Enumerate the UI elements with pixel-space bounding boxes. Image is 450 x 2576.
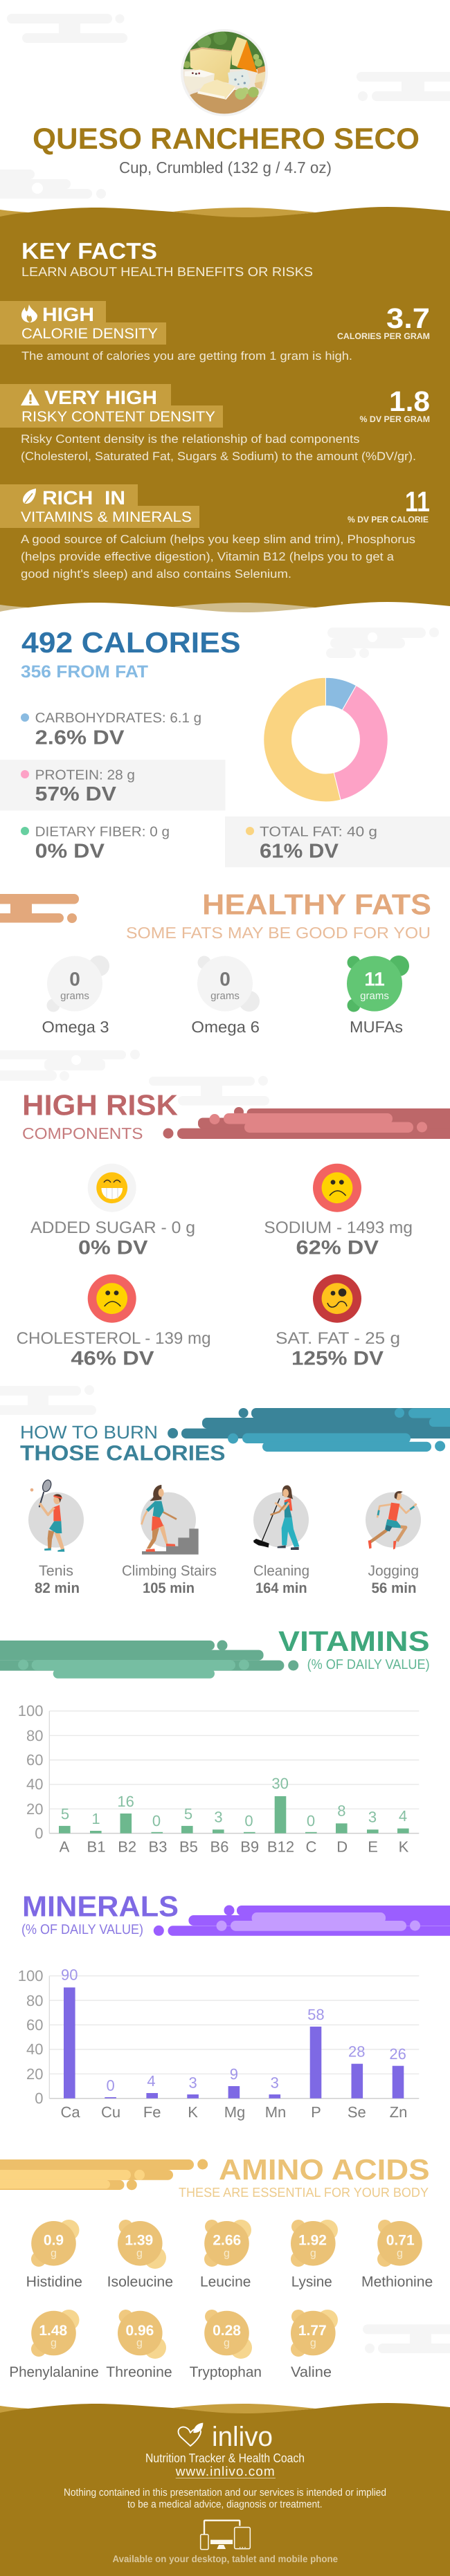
bar chart: vitamins: B9: [240, 1838, 259, 1855]
bar chart: minerals: 28: [348, 2043, 366, 2061]
amino: leucine: g: [224, 2247, 230, 2259]
panel: minerals: [18, 1890, 450, 2121]
bar chart: minerals: 4: [147, 2072, 156, 2090]
activity: tennis: Tenis: [39, 1563, 73, 1579]
stat: total fat: TOTAL FAT: 40 g: [260, 825, 377, 840]
bar chart: vitamins: 0: [307, 1812, 315, 1829]
bar chart: minerals: Mn: [265, 2103, 286, 2121]
amino: tryptophan: 0.28: [213, 2323, 241, 2339]
fact: very high risky content density: RISKY CONTENT DENSITY: [21, 409, 215, 425]
components subheading: COMPONENTS: [22, 1124, 143, 1142]
panel: key facts: [0, 207, 450, 623]
mufas: [347, 956, 409, 1036]
bar chart: vitamins: 20: [26, 1800, 43, 1818]
amino: threonine: 0.96: [125, 2323, 154, 2339]
fact: high calorie density: The amount of calories you are getting from 1 gram is high.: [21, 349, 352, 363]
fact: high calorie density: CALORIES PER GRAM: [337, 331, 430, 341]
amino: valine: g: [310, 2337, 316, 2349]
high risk heading: HIGH RISK: [22, 1088, 178, 1121]
fact: very high risky content density: 1.8: [389, 385, 430, 417]
fact: very high risky content density: % DV PER GRAM: [360, 414, 430, 424]
fact: rich in vitamins and minerals: VITAMINS & MINERALS: [21, 509, 192, 525]
how to burn heading: HOW TO BURN: [20, 1422, 158, 1443]
healthy fats heading: HEALTHY FATS: [202, 888, 431, 921]
bar chart: vitamins: [18, 1702, 419, 1855]
bar chart: vitamins: 5: [61, 1805, 69, 1823]
bar chart: vitamins: 30: [271, 1775, 289, 1792]
amino: valine: [291, 2310, 338, 2380]
item: added sugar: ADDED SUGAR - 0 g: [30, 1218, 195, 1237]
omega 3: Omega 3: [42, 1018, 109, 1036]
availability note: Available on your desktop, tablet and mobile phone: [112, 2553, 338, 2564]
bar chart: vitamins: 80: [26, 1727, 43, 1744]
fact: high calorie density: 3.7: [386, 302, 430, 334]
bar chart: minerals: 9: [230, 2065, 238, 2083]
brand name: inlivo: [212, 2422, 273, 2452]
fact: rich in vitamins and minerals: % DV PER CALORIE: [348, 515, 429, 524]
activity: tennis: 82 min: [35, 1580, 80, 1596]
amino: tryptophan: [190, 2310, 262, 2380]
item: cholesterol: 46% DV: [71, 1348, 154, 1370]
stat: protein: PROTEIN: 28 g: [35, 768, 135, 783]
minerals subheading: (% OF DAILY VALUE): [21, 1922, 143, 1937]
omega 6: 0: [219, 969, 231, 989]
donut chart: macronutrients: [264, 677, 388, 802]
item: sodium: SODIUM - 1493 mg: [264, 1218, 413, 1237]
stat: total fat: 61% DV: [260, 841, 339, 863]
stat: carbohydrates: CARBOHYDRATES: 6.1 g: [35, 711, 201, 726]
bar chart: vitamins: 5: [184, 1805, 192, 1823]
activity: climbing stairs: 105 min: [143, 1580, 195, 1596]
item: cholesterol: [17, 1275, 211, 1370]
bar chart: minerals: 3: [188, 2074, 197, 2091]
decorative bars: [163, 1107, 450, 1139]
amino acids heading: AMINO ACIDS: [219, 2153, 430, 2186]
bar chart: vitamins: 1: [91, 1810, 100, 1827]
panel: vitamins: [0, 1625, 430, 1855]
amino: methionine: 0.71: [386, 2233, 415, 2249]
omega 6: grams: [210, 990, 240, 1002]
item: sodium: 62% DV: [296, 1237, 379, 1259]
key facts subheading: LEARN ABOUT HEALTH BENEFITS OR RISKS: [21, 264, 313, 279]
icon: inlivo heart logo: [179, 2423, 203, 2446]
item: sodium: [264, 1164, 413, 1259]
panel: amino acids: [0, 2153, 450, 2380]
fact: rich in vitamins and minerals: [0, 484, 430, 581]
fact: high calorie density: CALORIE DENSITY: [21, 326, 158, 342]
item: saturated fat: [276, 1275, 400, 1370]
bar chart: minerals: 58: [307, 2006, 325, 2023]
amino: histidine: 0.9: [44, 2233, 64, 2249]
amino: methionine: Methionine: [361, 2274, 433, 2290]
bar chart: minerals: 26: [389, 2045, 406, 2063]
activity: jogging: Jogging: [368, 1563, 419, 1579]
omega 6: Omega 6: [191, 1018, 260, 1036]
fact: very high risky content density: VERY HIGH: [44, 387, 157, 408]
minerals heading: MINERALS: [22, 1890, 179, 1922]
bar chart: minerals: 20: [26, 2065, 43, 2083]
bar chart: minerals: P: [311, 2103, 321, 2121]
icon: devices: [201, 2521, 250, 2550]
amino: threonine: [106, 2310, 172, 2380]
tagline: Nutrition Tracker & Health Coach: [145, 2451, 305, 2465]
decorative bars: [0, 2159, 208, 2190]
bar chart: minerals: 80: [26, 1992, 43, 2009]
bar chart: vitamins: B5: [179, 1838, 198, 1855]
title: QUESO RANCHERO SECO: [33, 122, 420, 156]
bar chart: minerals: [18, 1966, 419, 2121]
bar chart: vitamins: 3: [368, 1809, 377, 1826]
food photo: cheese board: [181, 29, 268, 116]
amino: leucine: 2.66: [213, 2233, 241, 2249]
item: cholesterol: CHOLESTEROL - 139 mg: [17, 1329, 211, 1348]
bar chart: minerals: Se: [348, 2103, 366, 2121]
calories from fat: 356 FROM FAT: [21, 662, 148, 682]
activity: cleaning: Cleaning: [253, 1563, 309, 1579]
website link: www.inlivo.com: [175, 2465, 275, 2479]
bar chart: vitamins: 16: [117, 1793, 134, 1810]
amino: tryptophan: g: [224, 2337, 230, 2349]
key facts heading: KEY FACTS: [21, 238, 157, 264]
decorative header clouds: [0, 14, 450, 199]
amino: phenylalanine: [9, 2310, 99, 2380]
fact: high calorie density: [0, 301, 430, 363]
bar chart: vitamins: B12: [267, 1838, 294, 1855]
vitamins subheading: (% OF DAILY VALUE): [307, 1657, 430, 1672]
fact: very high risky content density: Risky Content density is the relationship of bad components: [21, 432, 360, 446]
fact: rich in vitamins and minerals: good night's sleep) and also contains Selenium.: [21, 567, 291, 581]
healthy fats subheading: SOME FATS MAY BE GOOD FOR YOU: [126, 924, 431, 942]
bar chart: minerals: 0: [35, 2090, 43, 2107]
vitamins heading: VITAMINS: [278, 1625, 430, 1657]
bar chart: vitamins: K: [399, 1838, 409, 1855]
panel: healthy fats: [0, 888, 431, 1036]
omega 6: [191, 956, 260, 1036]
bar chart: vitamins: 100: [18, 1702, 43, 1719]
amino: threonine: g: [136, 2337, 143, 2349]
bar chart: minerals: K: [188, 2103, 198, 2121]
panel: calories: [0, 626, 450, 868]
bar chart: vitamins: 60: [26, 1751, 43, 1769]
amino: histidine: Histidine: [26, 2274, 82, 2290]
amino acids subheading: THESE ARE ESSENTIAL FOR YOUR BODY: [179, 2186, 429, 2200]
bar chart: vitamins: 0: [152, 1812, 161, 1829]
stat: dietary fiber: 0% DV: [35, 841, 105, 863]
mufas: grams: [360, 990, 389, 1002]
stat: carbohydrates: 2.6% DV: [35, 727, 125, 749]
stat: dietary fiber: DIETARY FIBER: 0 g: [35, 825, 170, 840]
amino: valine: Valine: [291, 2364, 332, 2380]
fact: rich in vitamins and minerals: 11: [405, 486, 430, 518]
bar chart: vitamins: 3: [214, 1809, 223, 1826]
amino: valine: 1.77: [298, 2323, 327, 2339]
bar chart: vitamins: C: [305, 1838, 316, 1855]
item: added sugar: 0% DV: [78, 1237, 148, 1259]
panel: how to burn those calories: [20, 1408, 450, 1596]
activity: cleaning: [253, 1486, 309, 1596]
decorative bars: [154, 1906, 450, 1936]
amino: lysine: Lysine: [291, 2274, 332, 2290]
bar chart: vitamins: 40: [26, 1775, 43, 1793]
mufas: MUFAs: [350, 1018, 403, 1036]
bar chart: minerals: 3: [271, 2074, 279, 2091]
those calories heading: THOSE CALORIES: [20, 1441, 226, 1465]
decorative bars: [0, 1640, 298, 1679]
bar chart: minerals: 60: [26, 2016, 43, 2034]
bar chart: vitamins: D: [336, 1838, 348, 1855]
bar chart: minerals: Ca: [61, 2103, 80, 2121]
stat: protein: [0, 760, 226, 810]
amino: methionine: g: [397, 2247, 403, 2259]
stat: dietary fiber: [21, 825, 170, 863]
fact: very high risky content density: (Cholesterol, Saturated Fat, Sugars & Sodium) to the amount (%DV/gr).: [21, 450, 416, 463]
amino: isoleucine: 1.39: [125, 2233, 153, 2249]
decorative bars: [0, 894, 79, 923]
fact: rich in vitamins and minerals: RICH IN: [42, 487, 125, 509]
activity: tennis: [28, 1479, 84, 1596]
item: added sugar: [30, 1164, 195, 1259]
amino: phenylalanine: 1.48: [39, 2323, 68, 2339]
fact: rich in vitamins and minerals: A good source of Calcium (helps you keep slim and trim), Phosphorus: [21, 533, 415, 546]
amino: phenylalanine: g: [51, 2337, 57, 2349]
amino: lysine: [291, 2220, 338, 2290]
amino: tryptophan: Tryptophan: [190, 2364, 262, 2380]
amino: isoleucine: Isoleucine: [107, 2274, 173, 2290]
disclaimer: Nothing contained in this presentation and our services is intended or implied: [64, 2487, 386, 2499]
bar chart: minerals: Zn: [390, 2103, 407, 2121]
stat: total fat: [225, 816, 450, 868]
bar chart: vitamins: B6: [210, 1838, 228, 1855]
bar chart: minerals: Fe: [143, 2103, 161, 2121]
amino: histidine: g: [51, 2247, 57, 2259]
bar chart: minerals: Mg: [224, 2103, 245, 2121]
stat: protein: 57% DV: [35, 783, 117, 805]
omega 3: [42, 956, 109, 1036]
amino: isoleucine: g: [136, 2247, 143, 2259]
item: saturated fat: SAT. FAT - 25 g: [276, 1329, 400, 1348]
bar chart: minerals: 40: [26, 2040, 43, 2058]
disclaimer: [64, 2487, 386, 2510]
bar chart: vitamins: E: [368, 1838, 378, 1855]
decorative clouds above high risk: [0, 1050, 269, 1415]
bar chart: minerals: Cu: [101, 2103, 120, 2121]
omega 3: grams: [60, 990, 89, 1002]
fact: very high risky content density: [0, 384, 430, 463]
amino: lysine: 1.92: [298, 2233, 327, 2249]
amino: leucine: Leucine: [200, 2274, 251, 2290]
activity: climbing stairs: Climbing Stairs: [122, 1563, 217, 1579]
amino: leucine: [200, 2220, 251, 2290]
stat: carbohydrates: [21, 711, 201, 749]
mufas: 11: [364, 969, 385, 989]
panel: footer: [0, 2403, 450, 2576]
fact: rich in vitamins and minerals: (helps provide effective digestion), Vitamin B12 (helps you to get a: [21, 550, 395, 563]
activity: climbing stairs: [122, 1485, 217, 1596]
amino: threonine: Threonine: [106, 2364, 172, 2380]
omega 3: 0: [69, 969, 80, 989]
bar chart: minerals: 90: [61, 1966, 78, 1984]
bar chart: minerals: 0: [106, 2077, 115, 2094]
activity: jogging: 56 min: [371, 1580, 417, 1596]
bar chart: vitamins: 4: [399, 1807, 407, 1825]
amino: isoleucine: [107, 2220, 173, 2290]
bar chart: vitamins: A: [60, 1838, 70, 1855]
calories heading: 492 CALORIES: [21, 626, 241, 659]
decorative cloud: [326, 628, 439, 658]
amino: methionine: [361, 2220, 433, 2290]
decorative bars: [168, 1408, 450, 1452]
bar chart: vitamins: B1: [87, 1838, 105, 1855]
amino: phenylalanine: Phenylalanine: [9, 2364, 99, 2380]
panel: high risk components: [17, 1088, 450, 1370]
disclaimer: to be a medical advice, diagnosis or treatment.: [127, 2499, 323, 2510]
serving size subtitle: Cup, Crumbled (132 g / 4.7 oz): [119, 158, 332, 176]
bar chart: vitamins: 0: [35, 1825, 43, 1842]
bar chart: vitamins: 8: [337, 1802, 346, 1820]
bar chart: vitamins: B3: [149, 1838, 167, 1855]
activity: jogging: [366, 1491, 421, 1596]
amino: lysine: g: [310, 2247, 316, 2259]
bar chart: vitamins: B2: [118, 1838, 136, 1855]
fact: high calorie density: HIGH: [42, 304, 94, 325]
bar chart: minerals: 100: [18, 1967, 43, 1984]
item: saturated fat: 125% DV: [291, 1348, 384, 1370]
decorative cloud: [363, 2324, 450, 2353]
amino: histidine: [26, 2220, 82, 2290]
activity: cleaning: 164 min: [255, 1580, 307, 1596]
bar chart: vitamins: 0: [244, 1812, 253, 1829]
